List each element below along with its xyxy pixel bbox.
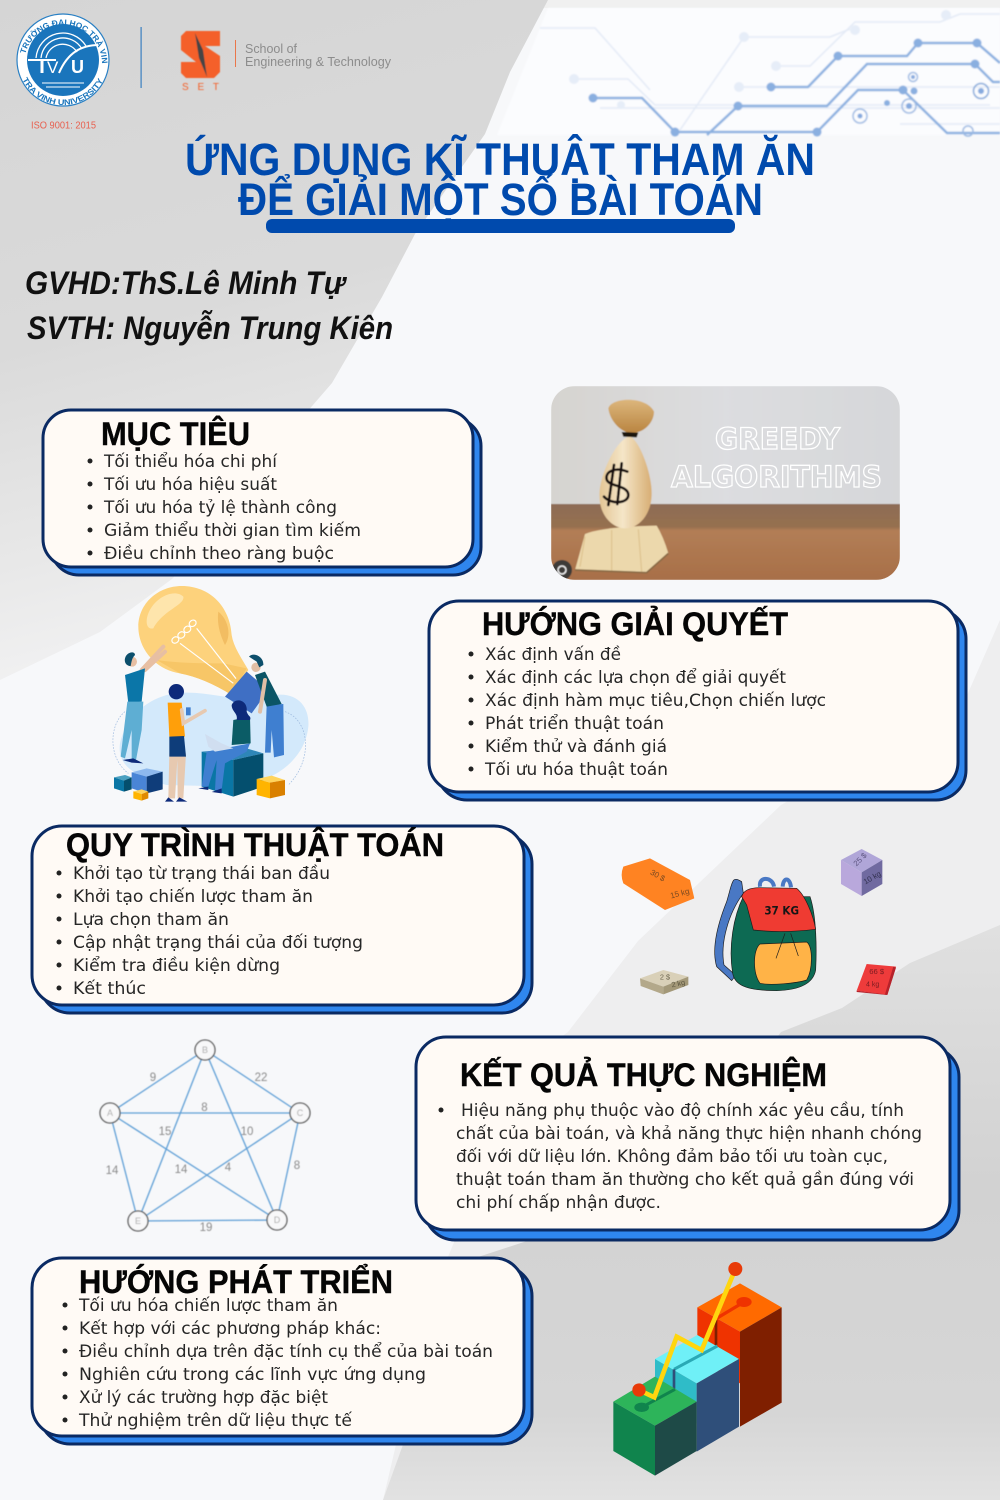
ISO label: ISO 9001: 2015 (31, 120, 96, 132)
heading: quy trình thuật toán: QUY TRÌNH THUẬT TOÁN (66, 827, 444, 863)
list: hướng giải quyết: Phát triển thuật toán (485, 714, 664, 733)
list: mục tiêu: Tối ưu hóa tỷ lệ thành công (103, 498, 337, 517)
list: hướng giải quyết: Xác định các lựa chọn để giải quyết (485, 668, 787, 687)
item: red box: 4 kg (866, 982, 879, 989)
graph diagram: 8 (201, 1102, 208, 1114)
photo: greedy algorithms (551, 386, 900, 580)
list: hướng giải quyết (468, 645, 826, 779)
chart: isometric rising bars (613, 1262, 782, 1476)
list: hướng phát triển: Thử nghiệm trên dữ liệu thực tế (78, 1411, 353, 1430)
graph diagram: 8 (294, 1160, 300, 1172)
item: beige box: 2 kg (671, 978, 686, 989)
panel: hướng phát triển (32, 1258, 532, 1444)
person: standing with phone (165, 684, 205, 802)
list: quy trình thuật toán: Khởi tạo chiến lược tham ăn (73, 887, 313, 906)
graph diagram (100, 1040, 310, 1234)
paragraph: kết quả: Hiệu năng phụ thuộc vào độ chính xác yêu cầu, tính (461, 1101, 904, 1120)
item: orange block: 15 kg (669, 887, 690, 900)
item: purple cube: 25 $ (852, 850, 869, 868)
list: quy trình thuật toán: Kết thúc (73, 979, 146, 998)
school name (235, 40, 391, 69)
graph diagram: E (135, 1216, 141, 1226)
graph diagram: 15 (159, 1126, 171, 1138)
graph diagram: 14 (106, 1165, 119, 1177)
graph diagram: 14 (175, 1164, 188, 1176)
list: mục tiêu: Điều chỉnh theo ràng buộc (104, 544, 334, 563)
list: hướng phát triển: Điều chỉnh dựa trên đặc tính cụ thể của bài toán (79, 1342, 493, 1361)
authors (25, 265, 393, 346)
paragraph: kết quả: chất của bài toán, và khả năng thực hiện nhanh chóng (456, 1124, 922, 1143)
logo: Tra Vinh University: TRA VINH UNIVERSITY (23, 76, 102, 106)
list: quy trình thuật toán (56, 864, 363, 998)
illustration: team with light bulb (113, 586, 308, 802)
title (185, 134, 815, 233)
list: hướng phát triển: Xử lý các trường hợp đặc biệt (79, 1388, 329, 1407)
graph diagram: A (107, 1108, 113, 1118)
photo caption (670, 426, 880, 488)
person: standing right (249, 655, 284, 757)
heading: mục tiêu: MỤC TIÊU (101, 416, 250, 452)
heading: kết quả thực nghiệm: KẾT QUẢ THỰC NGHIỆM (460, 1057, 827, 1093)
photo caption: GREEDY (715, 422, 841, 456)
authors: GVHD:ThS.Lê Minh Tự (25, 265, 348, 301)
item: purple cube: 10 kg (862, 869, 883, 886)
logo: SET: S E T (182, 82, 219, 93)
bar: orange (697, 1283, 782, 1427)
graph diagram: 22 (255, 1072, 267, 1084)
list: mục tiêu: Tối ưu hóa hiệu suất (103, 475, 278, 494)
illustration: knapsack and items (622, 849, 896, 995)
heading: hướng phát triển: HƯỚNG PHÁT TRIỂN (79, 1264, 393, 1300)
graph diagram: B (202, 1045, 208, 1055)
list: hướng phát triển: Nghiên cứu trong các lĩnh vực ứng dụng (79, 1365, 426, 1384)
person: seated with laptop (198, 700, 251, 793)
panel: mục tiêu (43, 410, 481, 575)
panel: hướng giải quyết (429, 601, 966, 800)
item: red box (857, 964, 896, 995)
person: left (121, 647, 165, 763)
logo: Tra Vinh University (16, 13, 110, 107)
logo: Tra Vinh University: V (47, 58, 59, 77)
list: mục tiêu (88, 452, 361, 563)
bar: green (613, 1377, 697, 1476)
list: hướng phát triển (62, 1296, 493, 1430)
graph diagram: 4 (225, 1162, 232, 1174)
authors: SVTH: Nguyễn Trung Kiên (27, 310, 393, 346)
logo: Tra Vinh University: U (71, 57, 84, 77)
list: quy trình thuật toán: Lựa chọn tham ăn (73, 910, 229, 929)
box seat (202, 748, 263, 797)
school name: Engineering & Technology (245, 54, 391, 69)
graph diagram: C (297, 1108, 304, 1118)
backpack (715, 879, 816, 991)
list: hướng giải quyết: Xác định hàm mục tiêu,Chọn chiến lược (485, 691, 826, 710)
item: beige box: 2 $ (660, 972, 670, 981)
list: mục tiêu: Tối thiểu hóa chi phí (103, 452, 278, 471)
paragraph: kết quả: thuật toán tham ăn thường cho kết quả gần đúng với (456, 1170, 914, 1189)
item: red box: 66 $ (869, 967, 885, 976)
list: quy trình thuật toán: Khởi tạo từ trạng thái ban đầu (73, 864, 330, 883)
graph diagram: 9 (150, 1072, 156, 1084)
backpack label: 37 KG (764, 904, 799, 918)
item: beige box (640, 970, 688, 994)
logo divider (140, 27, 142, 88)
title: ĐỂ GIẢI MỘT SỐ BÀI TOÁN (238, 174, 763, 225)
boxes (114, 768, 285, 801)
paragraph: kết quả: chi phí chấp nhận được. (456, 1193, 661, 1212)
heading: hướng giải quyết: HƯỚNG GIẢI QUYẾT (482, 606, 788, 642)
paragraph: kết quả: đối với dữ liệu lớn. Không đảm bảo tối ưu toàn cục, (456, 1147, 888, 1166)
item: orange block (622, 858, 694, 910)
panel: kết quả thực nghiệm (416, 1037, 959, 1240)
bar: cyan (655, 1335, 739, 1452)
list: hướng giải quyết: Tối ưu hóa thuật toán (484, 760, 668, 779)
logo: SET (181, 31, 220, 93)
list: quy trình thuật toán: Cập nhật trạng thái của đối tượng (73, 933, 363, 952)
list: hướng giải quyết: Kiểm thử và đánh giá (485, 737, 667, 756)
item: purple cube (841, 849, 883, 896)
list: hướng giải quyết: Xác định vấn đề (485, 645, 621, 664)
graph diagram: D (274, 1215, 281, 1225)
list: hướng phát triển: Kết hợp với các phương pháp khác: (79, 1319, 381, 1338)
item: orange block: 30 $ (649, 868, 667, 884)
circuit board decoration (497, 8, 1000, 136)
list: hướng phát triển: Tối ưu hóa chiến lược tham ăn (78, 1296, 338, 1315)
school name: School of (245, 41, 297, 56)
list: quy trình thuật toán: Kiểm tra điều kiện dừng (73, 956, 280, 975)
title: ỨNG DỤNG KĨ THUẬT THAM ĂN (185, 134, 815, 185)
graph diagram: 19 (200, 1222, 212, 1234)
graph diagram: 10 (241, 1126, 253, 1138)
list: mục tiêu: Giảm thiểu thời gian tìm kiếm (104, 521, 361, 540)
panel: quy trình thuật toán (32, 826, 532, 1013)
photo caption: ALGORITHMS (671, 460, 882, 494)
trend line (632, 1262, 742, 1397)
paragraph: kết quả (438, 1101, 922, 1212)
